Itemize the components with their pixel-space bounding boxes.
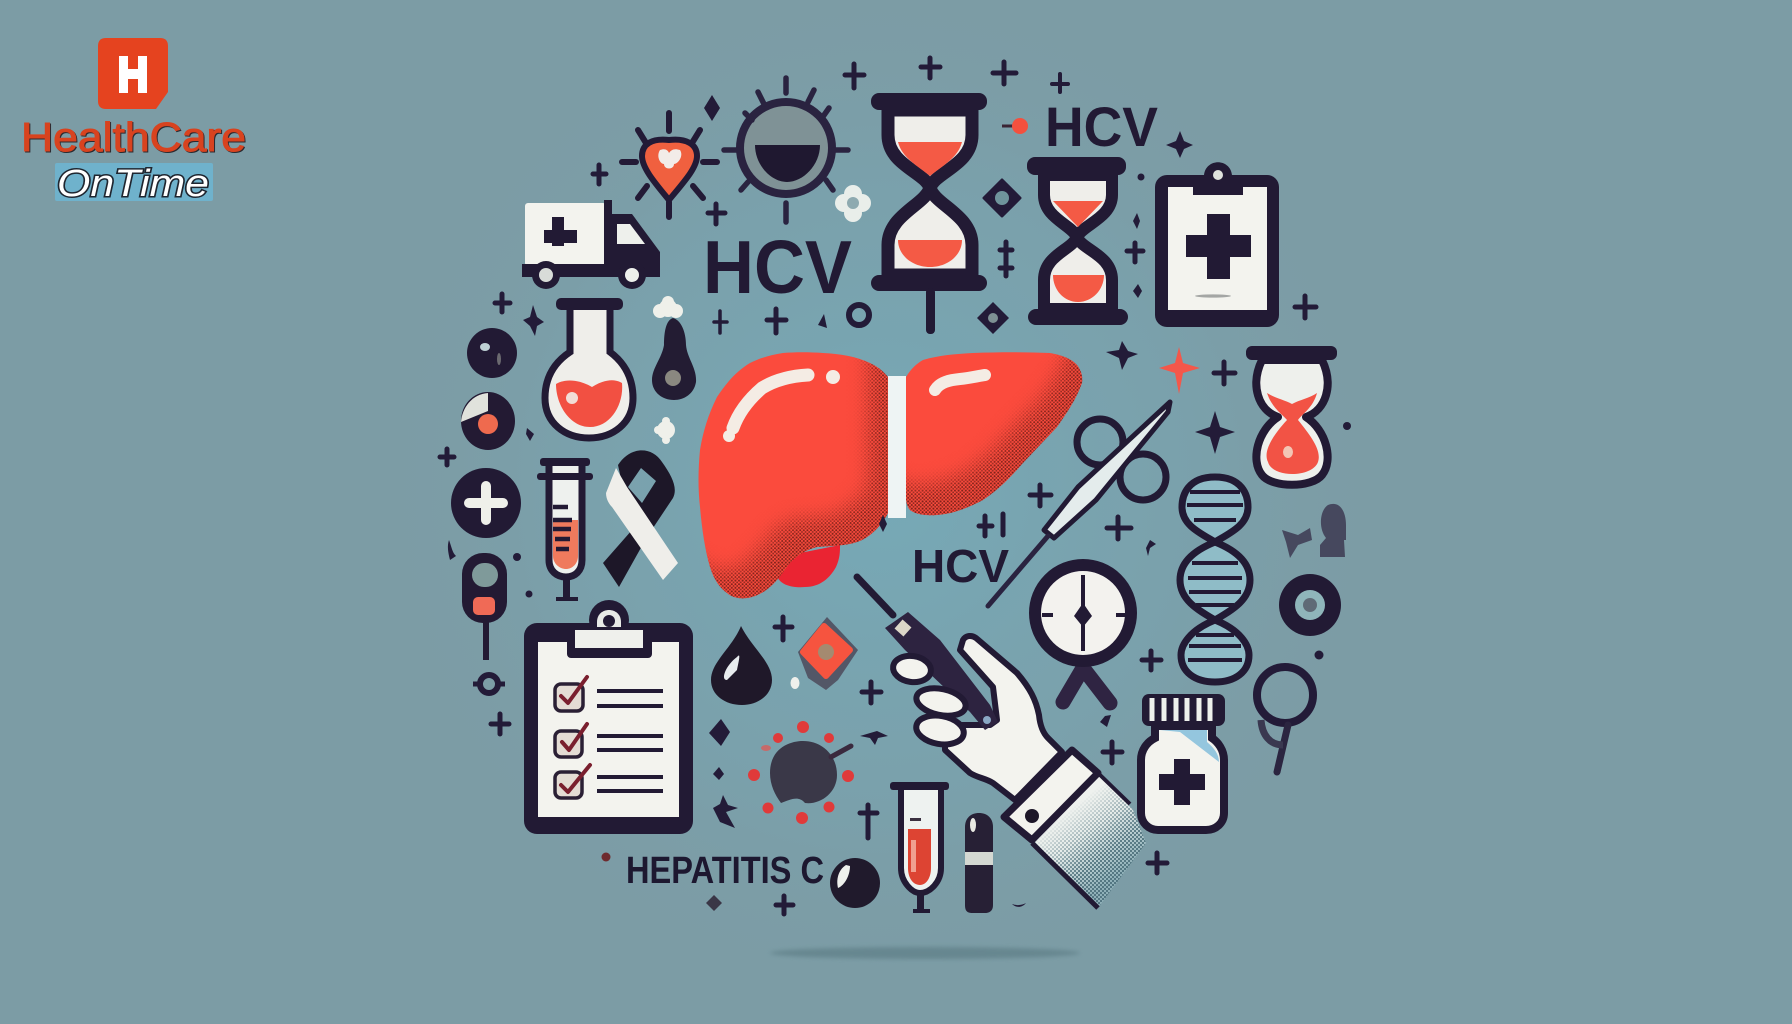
cuff (1004, 750, 1098, 840)
icon: pill capsule (965, 813, 993, 913)
heading: Hepatitis C: HEPATITIS C (626, 850, 824, 892)
logo wordmark: HealthCare: HealthCare (21, 114, 246, 160)
heading: HCV lower-centre: HCV (912, 540, 1009, 592)
icon: red diamond (790, 617, 858, 690)
palm (945, 636, 1062, 800)
icon: plus circle (451, 468, 521, 538)
icon: magnifier (1257, 667, 1313, 772)
fingers (891, 653, 968, 748)
sleeve (1032, 773, 1146, 908)
icon: hand holding syringe (857, 577, 1146, 908)
icon: red-filled hourglass (1246, 346, 1337, 485)
icon: pie circle (461, 392, 515, 450)
icon: clipboard with cross (1155, 162, 1279, 327)
icon: medicine bottle (1141, 694, 1225, 830)
icon: dark circle (467, 328, 517, 378)
liver (698, 352, 1082, 598)
icon: ambulance (522, 200, 660, 289)
icon: blurred figure (1282, 504, 1346, 558)
icon: target ring (1279, 574, 1341, 636)
logo: HealthCare OnTime (21, 38, 247, 205)
ground shadow (770, 947, 1080, 959)
icon: checklist clipboard (524, 600, 693, 834)
liver left lobe (698, 352, 888, 598)
heading: HCV centre-left: HCV (703, 225, 852, 309)
small sparkles and plus marks (440, 58, 1316, 914)
icon: pear shaped bulb (652, 318, 696, 400)
icon: small hourglass (1027, 157, 1128, 325)
icon: awareness ribbon (603, 450, 678, 587)
liver under-lobe (778, 545, 840, 587)
icon: test tube with blood (890, 782, 949, 913)
icon: clock with ribbon (1035, 565, 1131, 703)
icon: dark virus with red dots (748, 721, 854, 824)
icon: blood drop (711, 626, 772, 705)
icon: DNA helix (1180, 477, 1250, 682)
icon: white ring flower (835, 185, 871, 222)
icon: half sun (724, 78, 848, 222)
logo tag: OnTime: OnTime (57, 163, 209, 205)
icon: white flowers (653, 296, 683, 444)
liver right lobe (906, 352, 1082, 515)
icon: lock-shaped pin (462, 553, 507, 660)
icon: scalpel with scissor rings (988, 402, 1170, 606)
logo wordmark: HealthCare: HealthCare (22, 115, 247, 161)
heading: HCV top-right: HCV (1045, 95, 1158, 158)
infographic canvas (24, 38, 1351, 960)
icon: heart with rays (622, 113, 717, 217)
icon: flask (545, 298, 633, 438)
icon: vial (537, 458, 593, 601)
icon: black ball (830, 858, 880, 908)
icon: large hourglass (871, 93, 987, 334)
icon: red sparkle (1159, 347, 1200, 394)
logo icon: H badge (98, 38, 168, 109)
small dark diamonds and dots (448, 95, 1351, 911)
liver centre ligament (888, 376, 906, 518)
diamond rings and small circle marks (473, 180, 1020, 862)
syringe (857, 577, 998, 730)
label: red marker dot (1002, 118, 1028, 134)
